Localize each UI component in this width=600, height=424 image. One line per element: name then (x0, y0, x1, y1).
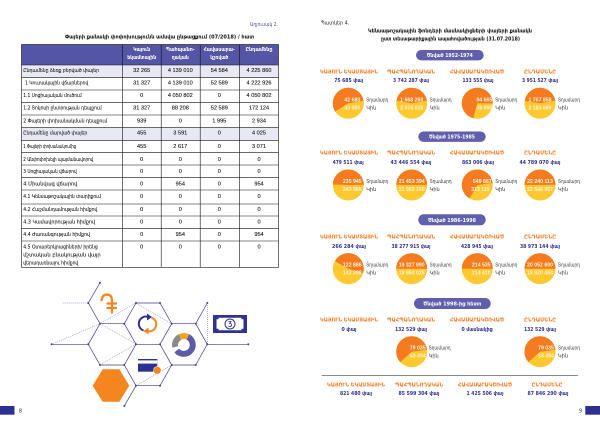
table rows: 0 (140, 220, 143, 226)
totals row: ՊԱՀՊԱՆՈՂԱԿԱՆ (395, 383, 443, 389)
table rows: 0 (257, 194, 261, 200)
table rows: 172 124 (249, 106, 269, 112)
table rows: 32 265 (133, 68, 150, 74)
pie chart: 214 535 (472, 263, 491, 269)
pie chart: 33 005 (344, 105, 360, 111)
table rows: 0 (140, 245, 143, 251)
table rows: 0 (140, 93, 143, 99)
pie chart: 313 119 (471, 187, 490, 193)
section row: 1952-1974: ՀԱՎԱՍԱՐԱԿՇՌՎԱԾ (450, 70, 504, 76)
totals row: ԿԱՅՈՒՆ ԵԿԱՄՏԱՅԻՆ (327, 383, 385, 389)
table rows: 52 589 (211, 81, 228, 87)
table rows: 0 (218, 131, 221, 137)
table rows: 954 (176, 182, 185, 188)
table rows: 1 Փայերի փոխանակումից (23, 144, 76, 150)
table rows: 0 (179, 118, 182, 124)
table rows: 4.5 Օտարերկրացիների/ իրենց (23, 245, 98, 251)
pie chart (462, 253, 518, 284)
table header: Կայուն (133, 47, 151, 53)
pie chart (333, 170, 389, 200)
table rows: վերադառնալու հիմքով (23, 260, 79, 266)
section row: 1986-1998: 266 284 փայ (332, 244, 366, 250)
table rows: 31 327 (133, 81, 150, 87)
figure title: Կենսաթոշակային ֆոնդերի մասնակիցների փայերի քանակն (368, 29, 532, 35)
section row: 1952-1974: 133 555 փայ (462, 78, 494, 84)
section row: 1998 and later: ԿԱՅՈՒՆ ԵԿԱՄՏԱՅԻՆ (320, 318, 378, 324)
table rows: 52 589 (211, 106, 228, 112)
page number bar: 9 (579, 406, 600, 415)
page number bar: 9: 9 (579, 408, 582, 414)
table rows: 3 071 (252, 144, 266, 150)
pie chart: 549 887 (473, 179, 492, 185)
pie chart: 18 920 454 (527, 271, 553, 277)
pie chart: 38 890 (476, 105, 492, 111)
totals row: 821 480 փայ (340, 391, 372, 397)
section row: 1975-1985: 863 006 փայ (462, 160, 494, 166)
section row: 1952-1974 (320, 70, 581, 119)
table rows: 3 Սոցիալական վճարով (23, 169, 77, 175)
section row: 1986-1998: 428 945 փայ (461, 244, 493, 250)
totals row (327, 383, 569, 397)
panel: left page (0, 22, 278, 415)
pie chart: Կին (558, 271, 568, 277)
section row: 1975-1985: 479 511 փայ (333, 160, 364, 166)
icon: dram sign (102, 294, 117, 314)
pie chart: Կին (558, 354, 568, 360)
section pill: 1986-1998: Ծնված 1986-1998 (428, 218, 476, 224)
pie chart: 20 052 690 (527, 263, 553, 269)
pie chart (524, 253, 581, 284)
pie chart: 2 074 018 (400, 105, 423, 111)
table rows: 455 (137, 131, 146, 137)
section row: 1975-1985: ԿԱՅՈՒՆ ԵԿԱՄՏԱՅԻՆ (320, 150, 378, 156)
pie chart (396, 336, 451, 367)
table rows: 2 934 (252, 118, 266, 124)
table rows: 455 (137, 144, 146, 150)
icon: orange hexagon (93, 369, 129, 402)
section row: 1975-1985: ՊԱՀՊԱՆՈՂԱԿԱՆ (387, 150, 435, 156)
table rows: Ընդամենը ձեռք բերված փայեր (23, 68, 99, 74)
section row: 1998 and later: ԸՆԴԱՄԵՆԸ (524, 318, 556, 324)
table rows: 4 222 926 (247, 81, 271, 87)
pie chart: 19 327 890 (399, 263, 425, 269)
section row: 1952-1974: ԿԱՅՈՒՆ ԵԿԱՄՏԱՅԻՆ (320, 70, 378, 76)
table rows: 0 (179, 207, 182, 213)
pie chart (462, 88, 518, 119)
pie chart: Կին (495, 187, 505, 193)
table rows: 31 327 (133, 106, 150, 112)
table rows: 0 (179, 220, 182, 226)
icon: credit card (138, 359, 161, 374)
table rows: 0 (218, 232, 221, 238)
pie chart (333, 88, 389, 119)
section row: 1998 and later: 0 մասնակից (462, 327, 493, 333)
table rows: 0 (218, 245, 221, 251)
section pill: 1952-1974: Ծնված 1952-1974 (427, 53, 473, 59)
table rows: 0 (179, 169, 182, 175)
icon: donut chart (175, 336, 193, 354)
pie chart: 79 035 (538, 346, 554, 352)
section row: 1952-1974: 75 685 փայ (334, 78, 363, 84)
section row: 1952-1974: ՊԱՀՊԱՆՈՂԱԿԱՆ (387, 70, 435, 76)
pie chart: Կին (430, 187, 440, 193)
table rows: 0 (218, 169, 221, 175)
table rows: 954 (176, 232, 185, 238)
totals row: ՀԱՎԱՍԱՐԱԿՇՌՎԱԾ (458, 383, 512, 389)
table rows: 0 (257, 157, 261, 163)
table rows: 88 208 (172, 106, 189, 112)
section row: 1998 and later: 132 529 փայ (395, 327, 427, 333)
table rows: 3 591 (173, 131, 187, 137)
section row: 1975-1985: ՀԱՎԱՍԱՐԱԿՇՌՎԱԾ (450, 150, 504, 156)
section pill: 1998 and later: Ծնված 1998-ից հետո (423, 302, 482, 308)
pie chart: Կին (495, 271, 505, 277)
table rows: 0 (257, 220, 261, 226)
table rows: 0 (218, 194, 221, 200)
pie chart: Տղամարդ (430, 97, 452, 103)
section row: 1975-1985: ԸՆԴԱՄԵՆԸ (524, 150, 556, 156)
table rows: 4 025 (252, 131, 266, 137)
figure label: Պատկեր 4. (321, 21, 349, 27)
pie chart: 235 945 (343, 179, 362, 185)
pie chart (524, 336, 581, 367)
table rows: 4.1 Կենսաթոշակային տարիքում (23, 194, 102, 200)
table rows: 4.2 Հաշմանդամության հիմքով (23, 207, 98, 213)
table rows: 2 Անփոփոխելի պայմանավորով (23, 157, 94, 163)
table rows: 0 (140, 157, 143, 163)
table rows: 0 (218, 157, 221, 163)
table rows: 4 139 010 (168, 68, 193, 74)
section row: 1986-1998: ՀԱՎԱՍԱՐԱԿՇՌՎԱԾ (450, 235, 504, 241)
pie chart: Տղամարդ (495, 179, 518, 185)
pie chart: 53 494 (410, 354, 426, 360)
pie chart: Տղամարդ (366, 97, 389, 103)
pie chart: 2 183 669 (528, 105, 552, 111)
pie chart (396, 88, 452, 119)
pie chart (462, 170, 518, 200)
table rows: 0 (140, 182, 143, 188)
section row: 1986-1998: ԸՆԴԱՄԵՆԸ (524, 235, 556, 241)
section pill: 1975-1985: Ծնված 1975-1985 (429, 135, 475, 141)
table rows: 0 (179, 194, 182, 200)
section pill: 1986-1998 (418, 214, 486, 225)
pie chart: 1 767 858 (528, 97, 552, 103)
section pill: 1952-1974 (416, 50, 484, 60)
section row: 1975-1985 (320, 150, 581, 200)
section row: 1986-1998: 38 973 144 փայ (520, 244, 560, 250)
table header: ղական (172, 55, 189, 61)
section row: 1998 and later: ՊԱՀՊԱՆՈՂԱԿԱՆ (387, 318, 435, 324)
pie chart: Կին (366, 105, 376, 111)
pie chart: 21 453 394 (399, 179, 425, 185)
pie chart: Կին (558, 105, 568, 111)
totals row: 85 599 304 փայ (398, 391, 440, 397)
pie chart (524, 170, 581, 200)
table rows: 0 (218, 182, 221, 188)
page number bar: 8 (0, 406, 22, 415)
table rows: 0 (140, 232, 143, 238)
section row: 1998 and later: 132 529 փայ (524, 327, 556, 333)
section row: 1986-1998: ԿԱՅՈՒՆ ԵԿԱՄՏԱՅԻՆ (320, 235, 378, 241)
pie chart (333, 253, 389, 284)
table rows: 1.2 Տոկոսի ընտրության դեպքում (23, 106, 102, 112)
table rows: 939 (137, 118, 146, 124)
table rows: 1.1 Սոցիալական մուծում (23, 93, 82, 99)
section row: 1986-1998 (320, 235, 581, 284)
totals row: ԸՆԴԱՄԵՆԸ (532, 383, 563, 389)
table rows: 4 050 802 (168, 93, 193, 99)
pie chart: 18 950 025 (399, 271, 425, 277)
table rows: 1 995 (212, 118, 226, 124)
pie chart: Տղամարդ (366, 179, 389, 185)
table header: եկամտային (127, 55, 157, 61)
section pill: 1998 and later (414, 298, 491, 309)
pie chart: Տղամարդ (558, 263, 581, 269)
table rows: 0 (257, 207, 261, 213)
table rows: 0 (179, 157, 182, 163)
panel: right page (320, 21, 600, 415)
table rows: 54 584 (211, 68, 228, 74)
table rows: Ընդամենը մարված փայեր (23, 131, 87, 137)
table rows: 2 617 (173, 144, 187, 150)
pie chart: Կին (366, 187, 376, 193)
table rows: 4 225 860 (247, 68, 271, 74)
pie chart: Տղամարդ (430, 263, 452, 269)
pie chart: Տղամարդ (430, 179, 452, 185)
section row: 1952-1974: 3 951 527 փայ (522, 78, 558, 84)
table header: Պահպանո- (166, 47, 195, 53)
section row: 1975-1985: 43 446 554 փայ (390, 160, 432, 166)
table rows: 0 (257, 245, 261, 251)
table rows: 4.3 Կամավորության հիմքով (23, 220, 96, 226)
totals row: 1 425 506 փայ (466, 391, 504, 397)
pie chart (396, 170, 452, 200)
table label: Աղյուսակ 2. (250, 22, 278, 28)
pie chart: Տղամարդ (495, 97, 518, 103)
table rows: 0 (218, 93, 221, 99)
pie chart: Տղամարդ (495, 263, 518, 269)
section row: 1986-1998: ՊԱՀՊԱՆՈՂԱԿԱՆ (387, 235, 435, 241)
figure title (368, 29, 532, 43)
table rows: 4 139 010 (168, 81, 193, 87)
section row: 1975-1985: 44 789 070 փայ (520, 160, 561, 166)
pie chart: Կին (495, 105, 505, 111)
table rows: 2 Փայերի փոխանակման դեպքում (23, 118, 108, 124)
table rows: 1 Կուտակային վճարներով (25, 81, 89, 87)
pie chart: Կին (430, 105, 440, 111)
pie chart: 79 035 (410, 346, 426, 352)
pie chart: 214 410 (472, 271, 491, 277)
table rows: 4.4 Ժառանգության հիմքով (23, 232, 91, 238)
totals row: 87 846 290 փայ (528, 391, 569, 397)
table rows: 954 (254, 232, 264, 238)
hexagon network illustration (51, 282, 249, 407)
pie chart: 21 993 160 (399, 187, 425, 193)
pie chart: Տղամարդ (558, 179, 581, 185)
pie chart: 22 548 957 (527, 187, 553, 193)
table (22, 44, 278, 267)
table rows: 0 (140, 169, 143, 175)
pie chart: Կին (558, 187, 568, 193)
pie chart: Կին (429, 354, 439, 360)
pie chart: Տղամարդ (429, 346, 451, 352)
pie chart: Կին (366, 271, 376, 277)
section row: 1986-1998: 38 277 915 փայ (392, 244, 431, 250)
pie chart: 22 240 113 (527, 179, 553, 185)
table rows: 0 (179, 245, 182, 251)
pie chart (524, 88, 581, 119)
pie chart: 1 668 269 (400, 97, 423, 103)
section row: 1998 and later: 0 փայ (342, 327, 357, 333)
icon: banknote (213, 315, 247, 333)
pie chart: 243 566 (343, 187, 362, 193)
pie chart: Տղամարդ (558, 97, 581, 103)
table title: Փայերի քանակի փոփոխությունն ամսվա ընթացքում (07/2018) / հատ (65, 35, 254, 41)
pie chart: Տղամարդ (366, 263, 389, 269)
table header (127, 47, 273, 61)
page number bar: 8: 8 (19, 408, 22, 414)
pie chart: Տղամարդ (558, 346, 581, 352)
table rows: 0 (218, 207, 221, 213)
pie chart: Կին (430, 271, 440, 277)
table rows: 0 (218, 144, 221, 150)
section pill: 1975-1985 (418, 132, 486, 142)
table rows: 4 Միանվագ վճարով (23, 182, 78, 188)
section row: 1952-1974: 3 742 287 փայ (393, 78, 429, 84)
figure title: ըստ տեսաթարիքային ապահովածության (31.07.2018) (381, 37, 520, 43)
section row: 1998 and later (320, 318, 581, 367)
pie chart: 42 680 (344, 97, 360, 103)
table rows: 0 (257, 169, 261, 175)
table rows: 4 050 802 (247, 93, 271, 99)
section row: 1952-1974: ԸՆԴԱՄԵՆԸ (524, 70, 556, 76)
table rows: 0 (218, 220, 221, 226)
pie chart: 53 494 (538, 354, 554, 360)
section row: 1998 and later: ՀԱՎԱՍԱՐԱԿՇՌՎԱԾ (450, 318, 504, 324)
pie chart: 122 886 (343, 263, 362, 269)
pie chart: 143 398 (343, 271, 362, 277)
pie chart: 94 665 (476, 97, 492, 103)
table header: Հավասարա- (204, 47, 235, 53)
icon: refresh arrows (139, 314, 156, 334)
table rows (23, 68, 271, 266)
pie chart (396, 253, 452, 284)
table rows: մշտական բնակության վայր (23, 252, 101, 258)
table header: Ընդամենը (246, 47, 273, 53)
table rows: 0 (140, 207, 143, 213)
table rows: 0 (140, 194, 143, 200)
table header: կշռված (210, 55, 229, 61)
table rows: 954 (254, 182, 264, 188)
